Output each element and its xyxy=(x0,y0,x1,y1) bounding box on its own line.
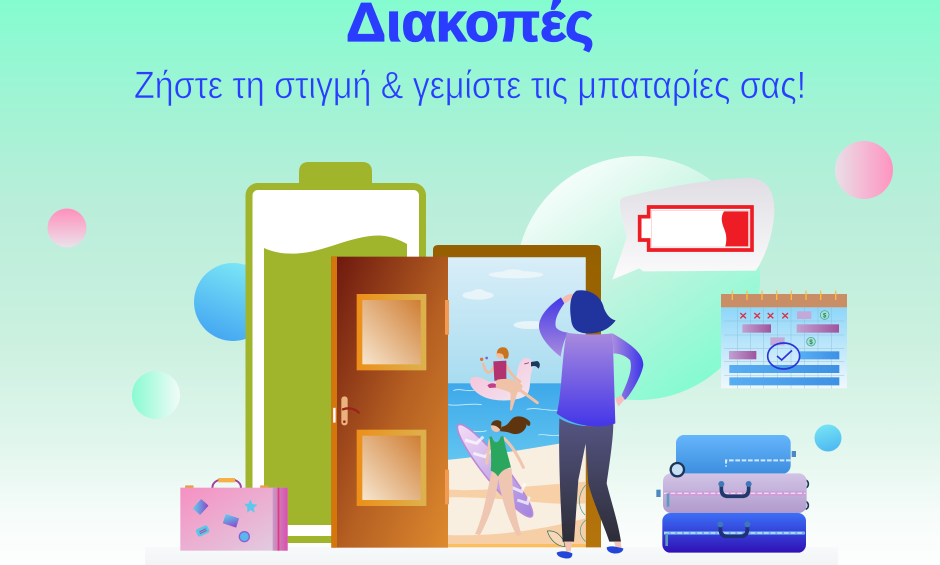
suitcase stack xyxy=(656,435,808,553)
door scene through frame xyxy=(433,245,643,558)
subtitle: Ζήστε τη στιγμή & γεμίστε τις μπαταρίες σας! xyxy=(134,65,806,107)
door hinges xyxy=(445,300,449,504)
flamingo float with woman xyxy=(470,347,540,411)
lower door panel xyxy=(357,430,426,506)
calendar: $ xyxy=(809,340,813,346)
pink suitcase with stickers xyxy=(180,478,288,551)
door frame xyxy=(433,245,601,547)
door handle xyxy=(333,396,359,425)
icon: check circle xyxy=(768,343,800,369)
sea xyxy=(447,383,586,463)
decorative circle: pink left xyxy=(48,208,86,248)
open door xyxy=(331,257,449,548)
icon: low battery xyxy=(640,207,752,250)
decorative circle: small blue xyxy=(814,424,842,452)
bottom suitcase xyxy=(662,513,806,553)
clouds xyxy=(462,269,547,329)
speech bubble with low battery xyxy=(612,178,774,280)
leaves xyxy=(547,485,586,547)
sky xyxy=(447,257,586,384)
calendar xyxy=(721,291,847,388)
sand xyxy=(447,439,586,547)
floor xyxy=(145,547,838,565)
calendar: $ xyxy=(823,313,827,319)
icon: large green battery xyxy=(249,162,422,540)
middle suitcase xyxy=(656,473,808,513)
woman looking at the beach xyxy=(539,290,643,558)
decorative circle: pink right xyxy=(835,141,893,199)
surfboard with woman xyxy=(450,416,540,537)
decorative circle: mint xyxy=(132,371,180,419)
decorative circle: blue xyxy=(194,263,272,341)
large circle behind person xyxy=(516,156,760,400)
top suitcase xyxy=(676,435,796,474)
suitcase wheel xyxy=(671,463,684,476)
stickers xyxy=(193,499,257,542)
upper door panel xyxy=(357,294,426,370)
